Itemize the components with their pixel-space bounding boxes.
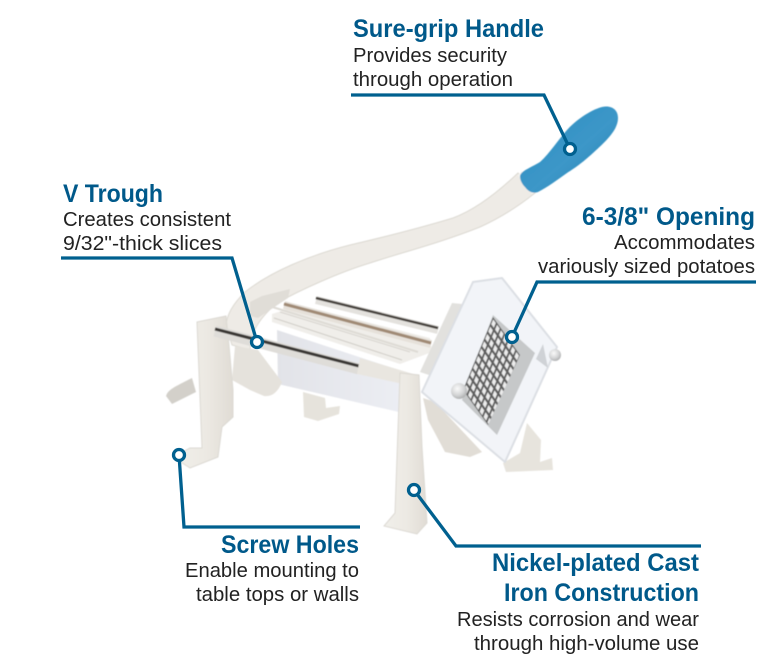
- description: Creates consistent: [63, 209, 231, 231]
- description: Resists corrosion and wear: [457, 609, 699, 631]
- heading: V Trough: [63, 180, 163, 208]
- heading line 2: Iron Construction: [504, 579, 699, 607]
- trough guide rails: [272, 305, 432, 364]
- trough body: [277, 330, 405, 413]
- description line 2: variously sized potatoes: [538, 256, 755, 278]
- leader line: [61, 258, 257, 342]
- rear brace under plate: [423, 398, 482, 457]
- left front leg: [173, 316, 233, 468]
- heading: Screw Holes: [221, 531, 359, 559]
- plate arrow mark: [536, 344, 548, 368]
- marker: [408, 484, 420, 496]
- white plate: [422, 278, 557, 462]
- left bolt: [451, 383, 467, 399]
- callout: opening: [506, 203, 756, 342]
- comb edge: [420, 303, 462, 378]
- handle pivot bracket: [250, 289, 290, 318]
- leader line: [414, 490, 701, 546]
- marker: [506, 332, 518, 342]
- heading: Sure-grip Handle: [353, 15, 544, 43]
- handle arm: [226, 173, 535, 350]
- front rod sleeve: [357, 358, 420, 384]
- description: Provides security: [353, 45, 507, 67]
- cutting grid: [463, 317, 520, 425]
- description: Enable mounting to: [185, 560, 359, 582]
- callout: nickel-plated construction: [408, 484, 701, 655]
- leader line: [512, 282, 756, 337]
- front rod: [215, 329, 359, 369]
- marker: [564, 144, 576, 154]
- rear rod lower: [284, 304, 431, 344]
- callout: sure-grip handle: [351, 15, 576, 154]
- heading: 6-3/8" Opening: [582, 203, 755, 231]
- marker: [252, 336, 262, 348]
- right front leg: [384, 373, 427, 534]
- rear right leg: [503, 423, 553, 472]
- top crossbar: [253, 301, 418, 352]
- description line 2: through operation: [353, 69, 513, 91]
- plate window: [462, 315, 535, 435]
- callout: v trough: [61, 180, 262, 348]
- description: Accommodates: [614, 232, 755, 254]
- description line 2: through high-volume use: [474, 633, 699, 655]
- rear rod upper: [316, 298, 438, 330]
- side screw: [166, 378, 196, 404]
- description line 2: table tops or walls: [196, 584, 359, 606]
- marker: [174, 450, 184, 460]
- description line 2: 9/32"-thick slices: [63, 233, 222, 255]
- leader line: [351, 95, 570, 149]
- grip collar: [518, 171, 536, 194]
- callout: screw holes: [174, 450, 360, 606]
- lower link bracket: [232, 346, 282, 396]
- right bolt: [549, 349, 561, 361]
- rear centre foot: [303, 392, 340, 421]
- product: french fry cutter: [166, 107, 618, 534]
- handle grip: [520, 107, 618, 193]
- heading: Nickel-plated Cast: [492, 549, 700, 577]
- leader line: [179, 455, 360, 527]
